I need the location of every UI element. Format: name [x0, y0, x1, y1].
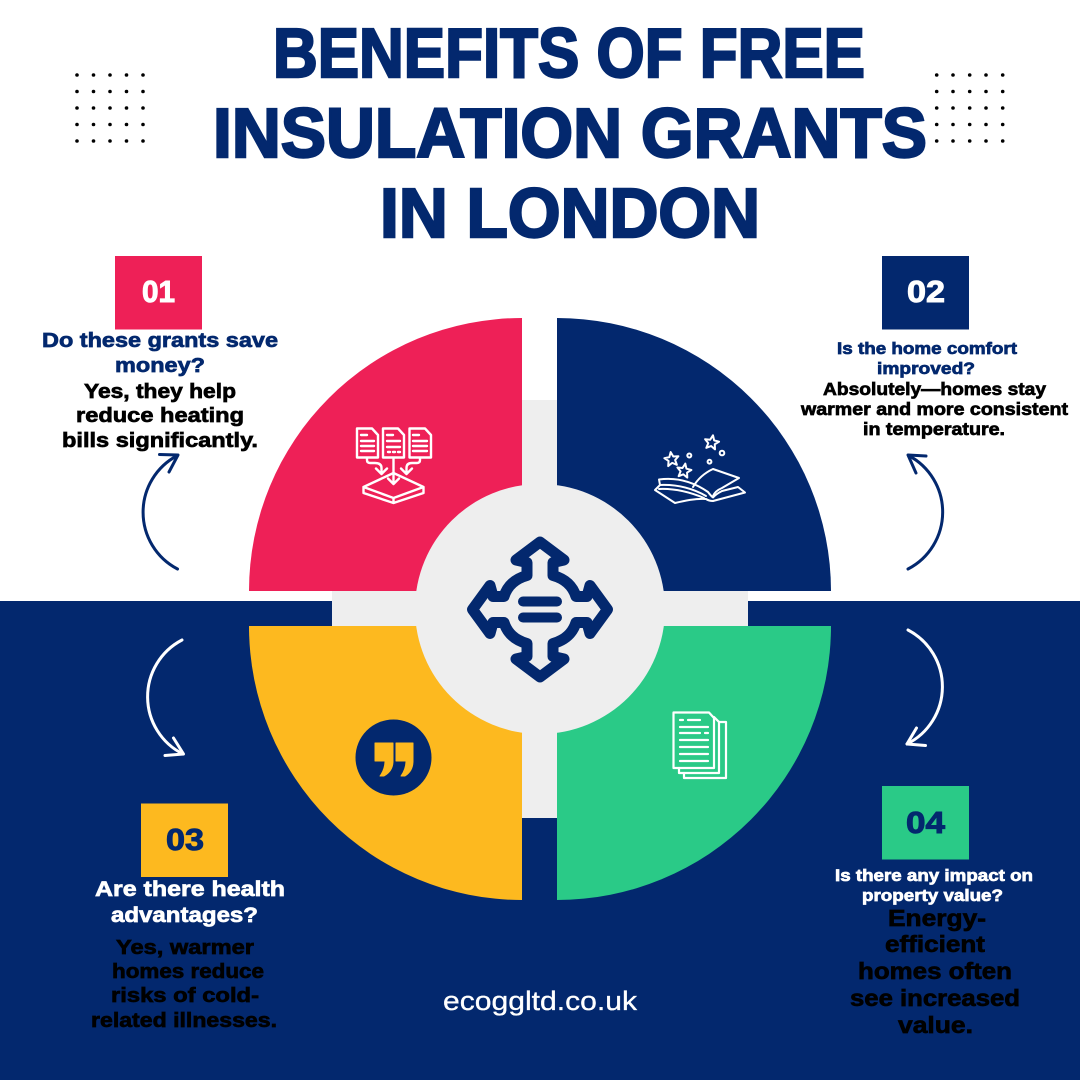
title: IN LONDON — [380, 174, 760, 252]
panel 02 — [800, 256, 1068, 439]
number badge 04: 04 — [906, 805, 946, 840]
arrow 3 — [148, 640, 184, 756]
question 2: Is the home comfort — [837, 340, 1018, 358]
number badge 02: 02 — [907, 274, 945, 309]
answer 4: homes often — [858, 958, 1012, 984]
title: INSULATION GRANTS — [213, 94, 927, 172]
answer 4 — [850, 905, 1020, 1038]
answer 3: Yes, warmer — [116, 936, 254, 959]
quarter: green — [557, 626, 831, 900]
quarter: yellow — [249, 626, 522, 900]
answer 4: Energy- — [888, 905, 986, 931]
panel 03 — [91, 804, 285, 1032]
answer 1: Yes, they help — [84, 380, 236, 403]
answer 2: warmer and more consistent — [800, 399, 1068, 419]
answer 4: efficient — [885, 931, 985, 957]
icon: quotation mark badge — [356, 720, 432, 796]
title — [213, 14, 927, 252]
answer 1: reduce heating — [76, 404, 244, 427]
question 3 — [95, 877, 285, 927]
number badge 01: 01 — [142, 274, 175, 309]
dot grid right — [935, 73, 1004, 143]
question 3: advantages? — [111, 903, 258, 927]
question 2 — [837, 340, 1018, 378]
website url: ecoggltd.co.uk — [443, 986, 638, 1016]
answer 2 — [800, 379, 1068, 439]
dot grid left — [75, 73, 145, 143]
answer 3: homes reduce — [112, 960, 264, 983]
icon: open book with stars — [655, 434, 745, 503]
answer 3: related illnesses. — [91, 1009, 277, 1032]
answer 1: bills significantly. — [62, 429, 258, 452]
answer 4: see increased — [850, 985, 1020, 1011]
answer 3: risks of cold- — [111, 984, 259, 1007]
number badge 04 — [882, 786, 969, 860]
answer 1 — [62, 380, 258, 452]
question 1: money? — [115, 354, 205, 377]
answer 3 — [91, 936, 277, 1032]
grey cross behind the quarters — [332, 400, 748, 818]
number badge 03 — [141, 804, 228, 877]
icon: stacked documents — [674, 712, 726, 778]
question 4 — [835, 867, 1033, 905]
icon: documents into tray — [357, 428, 431, 503]
icon: centre four-way arrows — [472, 542, 608, 677]
quarter: red — [249, 318, 522, 591]
number badge 01 — [115, 256, 202, 330]
question 1: Do these grants save — [42, 329, 278, 352]
centre circle — [415, 484, 665, 734]
question 3: Are there health — [95, 877, 285, 901]
answer 2: in temperature. — [863, 419, 1005, 439]
title: BENEFITS OF FREE — [273, 14, 865, 92]
question 4: property value? — [862, 887, 1003, 905]
answer 2: Absolutely—homes stay — [823, 379, 1046, 399]
arrow 2 — [908, 455, 943, 569]
panel 01 — [42, 256, 278, 452]
answer 4: value. — [898, 1012, 973, 1038]
question 4: Is there any impact on — [835, 867, 1033, 885]
arrow 1 — [143, 454, 178, 569]
question 1 — [42, 329, 278, 377]
number badge 03: 03 — [166, 822, 204, 857]
number badge 02 — [882, 256, 969, 330]
panel 04 — [835, 786, 1033, 1038]
quarter: navy — [557, 318, 831, 591]
question 2: improved? — [877, 360, 975, 378]
arrow 4 — [907, 630, 942, 746]
